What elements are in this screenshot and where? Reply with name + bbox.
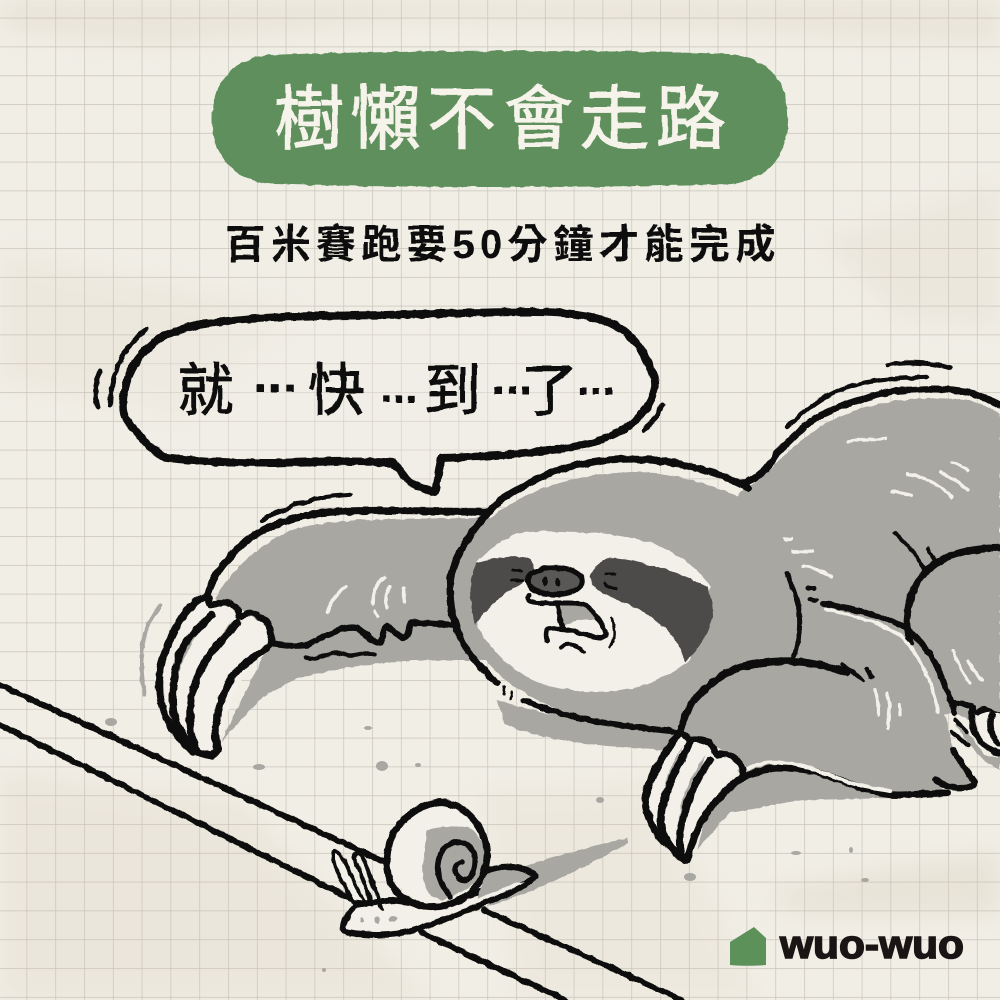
speech text: 快 <box>308 359 365 423</box>
speech text: … <box>252 350 298 402</box>
snail foot <box>343 877 535 935</box>
front arm <box>645 604 982 860</box>
face mask <box>477 531 710 692</box>
right hand claws <box>645 732 743 860</box>
speech text <box>177 350 616 423</box>
ground lines <box>0 685 682 1000</box>
speech text: … <box>380 369 418 411</box>
left eye patch <box>470 557 534 625</box>
title banner <box>212 51 788 187</box>
sloth <box>141 363 1000 860</box>
logo house icon <box>730 927 766 966</box>
speech text: 到 <box>424 359 481 423</box>
snail tail <box>478 869 535 898</box>
speech text: … <box>576 359 616 403</box>
bubble shake marks <box>96 330 662 430</box>
logo wordmark: wuo-wuo <box>779 923 964 967</box>
subtitle: 百米賽跑要50分鐘才能完成 <box>225 223 775 267</box>
head <box>450 459 816 732</box>
eye marks <box>511 569 616 589</box>
logo <box>730 923 964 967</box>
title text: 樹懶不會走路 <box>274 80 726 158</box>
speech bubble <box>96 312 662 492</box>
speech text: 了 <box>521 359 578 423</box>
speech text: 就 <box>177 359 234 423</box>
left hand claws <box>141 595 271 757</box>
snail <box>333 802 628 935</box>
speech text: … <box>490 355 534 404</box>
rear thigh <box>907 548 1000 712</box>
mouth <box>528 595 606 640</box>
tongue <box>560 604 598 627</box>
right eye patch <box>590 558 713 662</box>
ground shadow under head <box>497 700 685 750</box>
body <box>700 363 1000 720</box>
snail shadow <box>487 838 628 907</box>
shell <box>389 807 487 905</box>
left arm <box>207 494 490 743</box>
hand shadow <box>697 765 947 850</box>
nose <box>528 568 582 594</box>
ground specks <box>105 718 869 972</box>
rear claws <box>955 703 1000 770</box>
antennae <box>333 851 366 903</box>
